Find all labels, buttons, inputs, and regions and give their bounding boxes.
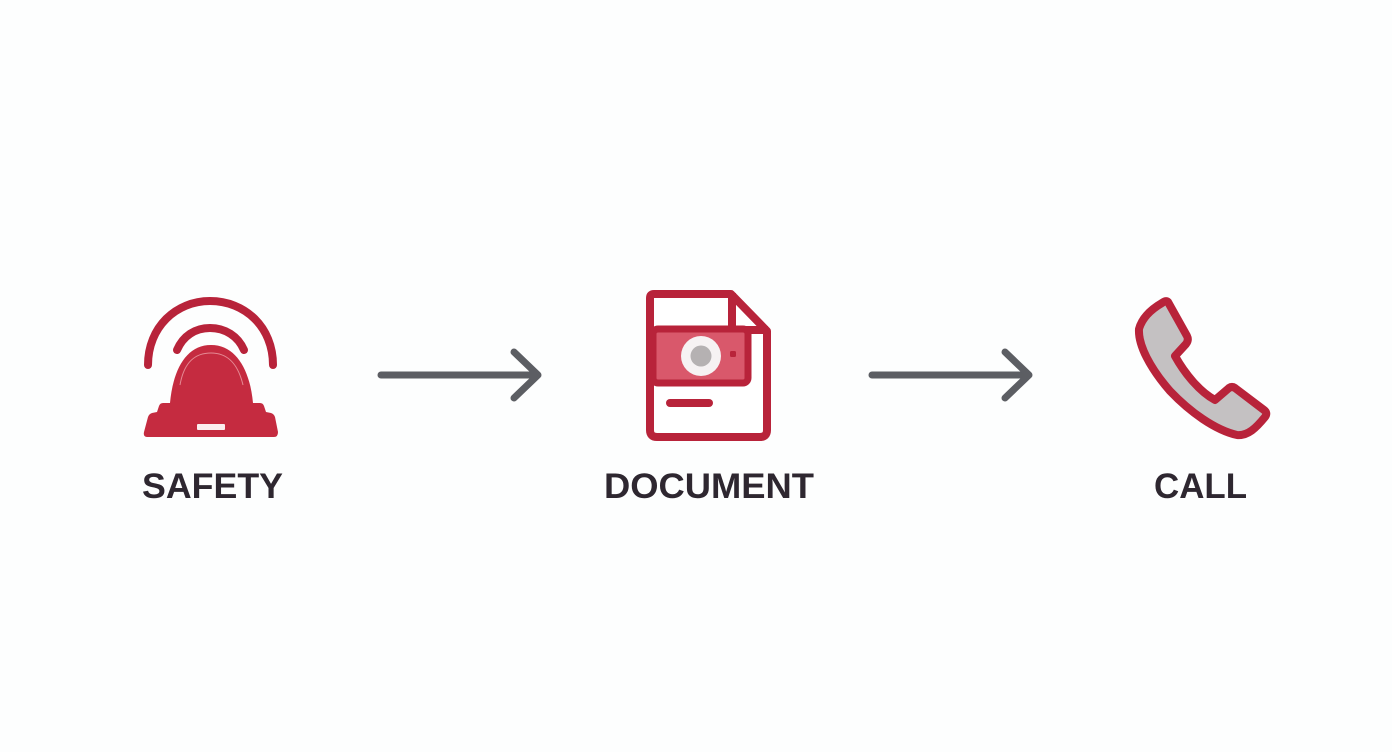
- label: safety: SAFETY: [142, 467, 283, 506]
- beacon slot: [197, 424, 225, 430]
- step: safety: [142, 301, 283, 506]
- label: document: DOCUMENT: [604, 467, 814, 506]
- step: document: [604, 293, 814, 506]
- camera lens ring: [681, 336, 721, 376]
- label: call: CALL: [1154, 467, 1247, 506]
- document outline: [650, 294, 767, 437]
- beacon highlight: [180, 353, 243, 385]
- arrow: safety to document: [381, 352, 538, 398]
- page fold: [732, 293, 768, 330]
- icon: telephone handset: [1139, 301, 1266, 435]
- step: call: [1139, 301, 1266, 506]
- text line: [670, 399, 709, 407]
- inner signal arc: [177, 328, 244, 350]
- icon: alarm beacon: [144, 301, 278, 437]
- arrow: document to call: [872, 352, 1029, 398]
- outer signal arc: [148, 301, 273, 365]
- camera indicator: [730, 351, 736, 357]
- camera body: [653, 329, 748, 383]
- icon: document with camera: [650, 293, 768, 437]
- beacon body: [144, 345, 278, 437]
- camera lens: [690, 346, 712, 366]
